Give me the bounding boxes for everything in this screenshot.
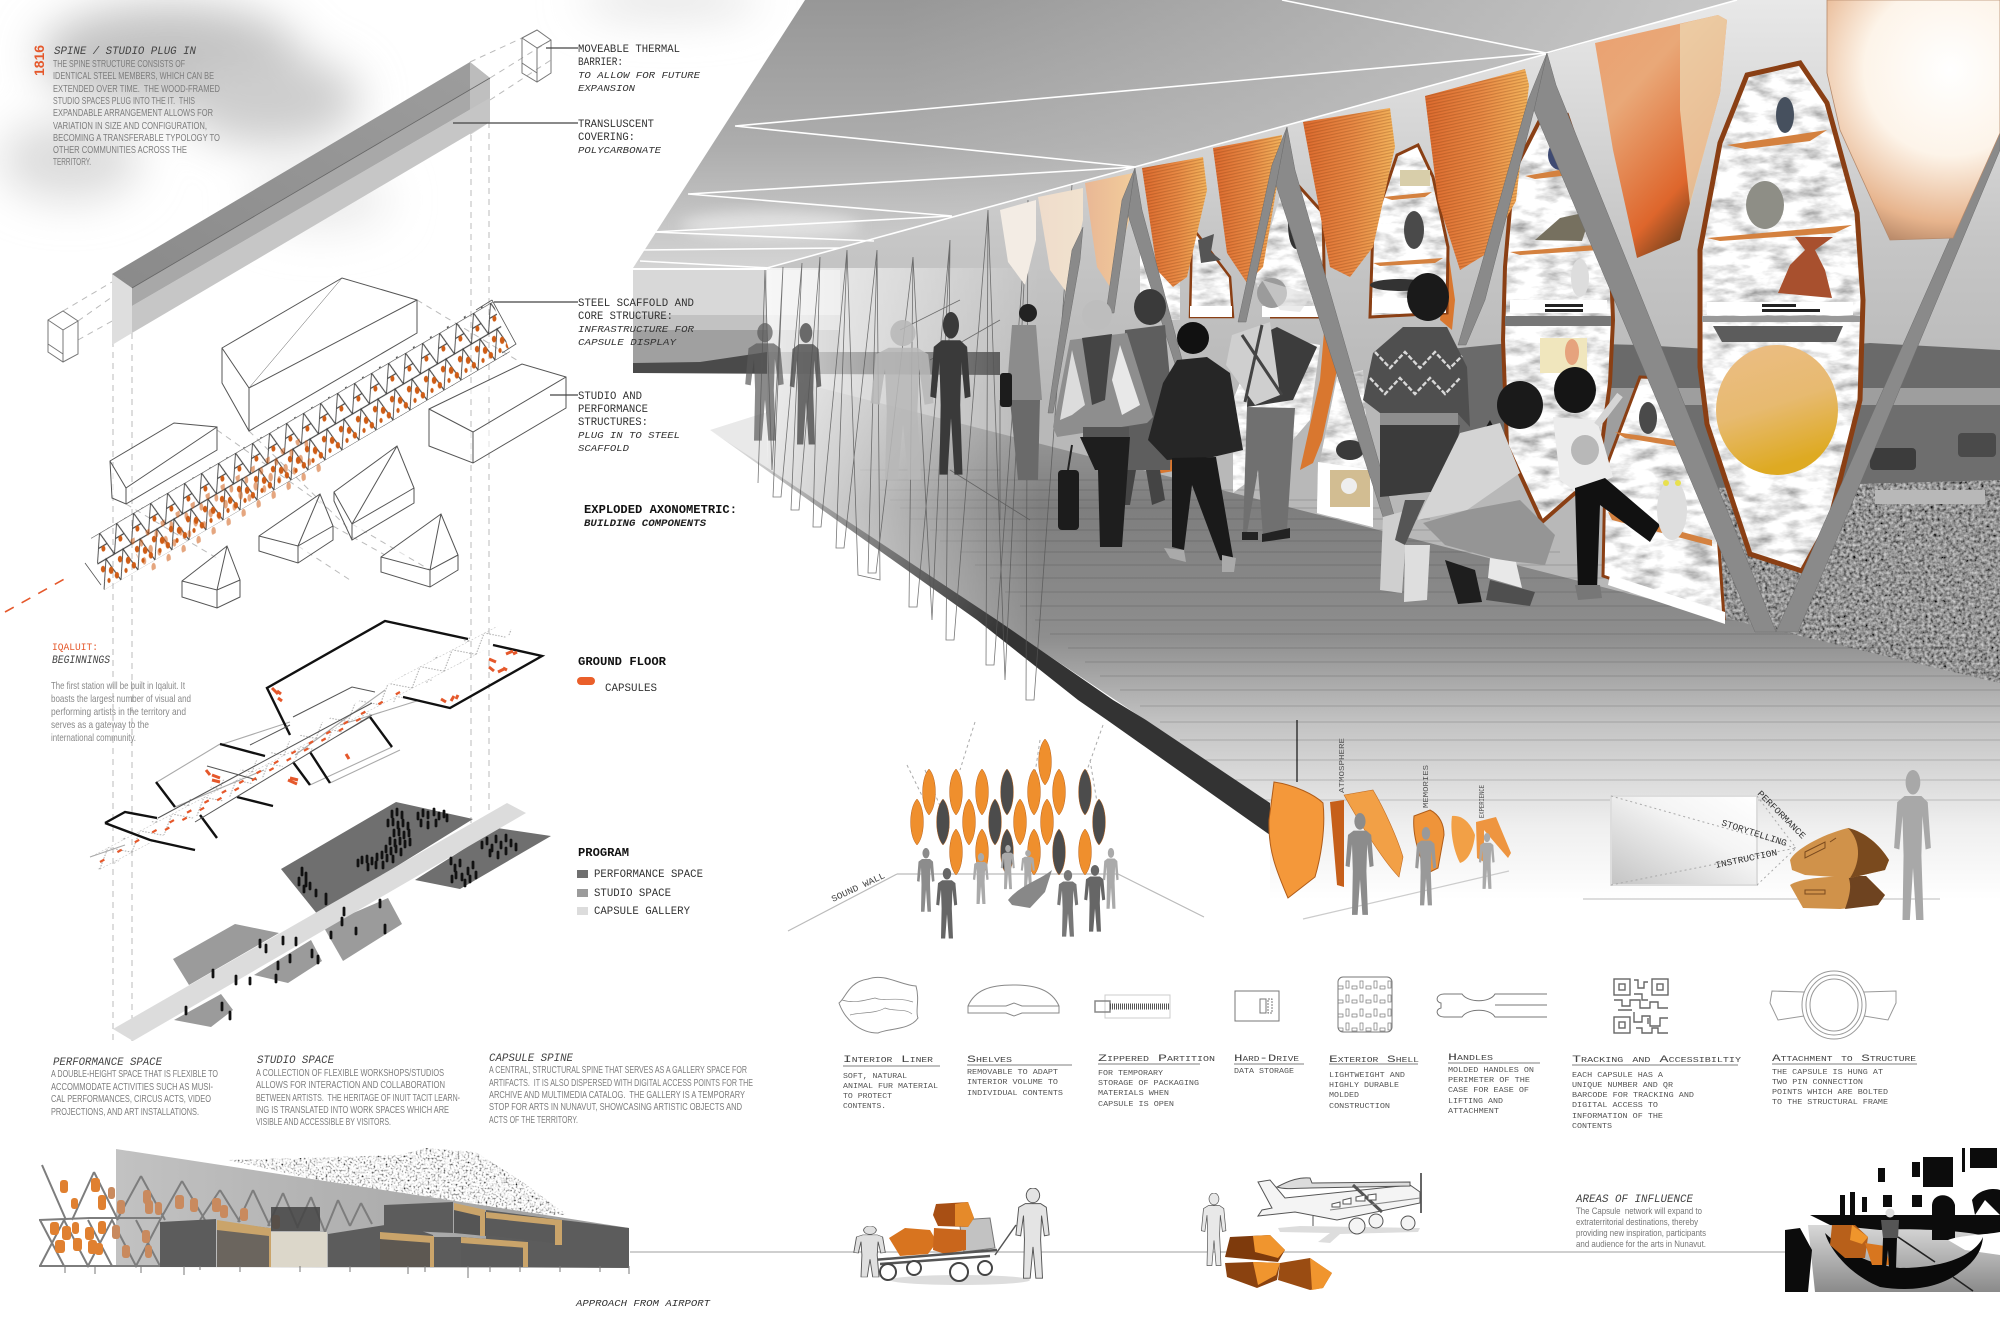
component: zippered partition — [1095, 995, 1215, 1109]
person: woman in black suit — [1148, 322, 1243, 572]
big render: sky backdrop — [633, 0, 2000, 690]
body text: IDENTICAL STEEL MEMBERS, WHICH CAN BE — [53, 70, 214, 82]
body: DIGITAL ACCESS TO — [1572, 1102, 1658, 1110]
body: PERIMETER OF THE — [1448, 1077, 1530, 1085]
text block: areas of influence: extraterritorial destinations, thereby — [1576, 1217, 1698, 1228]
icon: zipper — [1095, 995, 1170, 1018]
callout: studio and performance structures: STUDIO AND — [578, 391, 642, 403]
callout: studio and performance structures: STRUCTURES: — [578, 417, 648, 429]
diagram: capsule uses performance storytelling instruction — [1583, 770, 1940, 920]
gondolier — [1881, 1208, 1973, 1291]
label: studio: STUDIO SPACE — [594, 888, 671, 900]
body: LIGHTWEIGHT AND — [1329, 1072, 1405, 1080]
heading: Attachment to Structure — [1772, 1053, 1916, 1065]
big render: steel A-frames — [1048, 53, 2000, 632]
body: THE CAPSULE IS HUNG AT — [1772, 1069, 1883, 1077]
text block: capsule spine — [489, 1053, 753, 1126]
case: child case — [1603, 377, 1725, 624]
person: distant figures — [745, 323, 821, 445]
body — [843, 1073, 938, 1111]
person: woman in patterned sweater — [1363, 273, 1470, 602]
text block: capsule spine: ARTIFACTS. IT IS ALSO DISPERSED WITH DIGITAL ACCESS POINTS FOR THE — [489, 1077, 753, 1089]
lattice frames — [39, 1165, 372, 1266]
legend: ground floor — [577, 655, 667, 695]
body: DATA STORAGE — [1234, 1068, 1294, 1076]
small capsules — [50, 1178, 280, 1258]
dark panel — [271, 1207, 320, 1231]
case: right boat — [1700, 63, 1863, 571]
people — [1346, 813, 1495, 915]
floor lines — [788, 874, 1204, 931]
body: EACH CAPSULE HAS A — [1572, 1072, 1664, 1080]
case: far small cases — [1140, 227, 1233, 320]
label: performance: PERFORMANCE — [1755, 789, 1807, 841]
icon: liner — [839, 977, 918, 1033]
callout: translucent covering: COVERING: — [578, 132, 635, 144]
body: LIFTING AND — [1448, 1098, 1503, 1106]
heading: Exterior Shell — [1329, 1054, 1419, 1066]
light room edges — [90, 690, 420, 857]
text block: performance space: PROJECTIONS, AND ART INSTALLATIONS. — [51, 1106, 199, 1118]
interior lines — [158, 687, 375, 822]
callout: moveable thermal barrier: MOVEABLE THERMAL — [578, 44, 680, 56]
heading: Zippered Partition — [1098, 1053, 1215, 1065]
artifact: snowy owl — [1657, 480, 1687, 540]
spine band — [90, 625, 517, 872]
label: 1816: 1816 — [31, 45, 47, 76]
body text: VARIATION IN SIZE AND CONFIGURATION, — [53, 120, 207, 132]
people — [917, 845, 1119, 939]
label: SOUND WALL — [830, 871, 887, 905]
text block: studio space: STUDIO SPACE — [257, 1055, 334, 1067]
person: child — [1553, 367, 1660, 600]
wood portal — [270, 1232, 327, 1267]
body — [967, 1069, 1063, 1098]
heading: GROUND FLOOR — [578, 655, 667, 669]
body text: serves as a gateway to the — [51, 719, 149, 731]
callout: studio and performance structures: PLUG IN TO STEEL — [578, 430, 680, 441]
heading: exploded axonometric — [584, 503, 737, 530]
component: tracking and accessibility — [1572, 979, 1742, 1131]
person: man with backpack — [1226, 278, 1317, 542]
text block: performance space: ACCOMMODATE ACTIVITIES SUCH AS MUSI- — [51, 1081, 213, 1093]
heading: Shelves — [967, 1054, 1012, 1066]
callout: studio and performance structures: PERFORMANCE — [578, 404, 648, 416]
body text: EXTENDED OVER TIME. THE WOOD-FRAMED — [53, 83, 220, 95]
body: MOLDED — [1329, 1092, 1359, 1100]
callout: translucent covering: TRANSLUSCENT — [578, 119, 654, 131]
person: man at rail — [1000, 304, 1042, 480]
suitcase — [959, 1218, 995, 1252]
label: memories: MEMORIES — [1423, 765, 1431, 808]
swatch: performance — [577, 870, 588, 878]
case: tall case G — [1370, 145, 1448, 317]
artifact: drum — [1716, 345, 1838, 475]
body: STORAGE OF PACKAGING — [1098, 1080, 1199, 1088]
callout: steel scaffold — [578, 298, 694, 348]
body: POINTS WHICH ARE BOLTED — [1772, 1089, 1888, 1097]
label: CAPSULES — [605, 683, 657, 695]
cart — [873, 1250, 997, 1264]
label: storytelling: STORYTELLING — [1720, 818, 1788, 849]
big render: wooden deck — [767, 375, 2000, 900]
person: woman behind — [1120, 289, 1172, 505]
body: MATERIALS WHEN — [1098, 1090, 1169, 1098]
body: BARCODE FOR TRACKING AND — [1572, 1092, 1694, 1100]
capsule 3 — [1414, 810, 1444, 873]
text block: performance space: A DOUBLE-HEIGHT SPACE THAT IS FLEXIBLE TO — [51, 1068, 218, 1080]
diagram: translucent spine — [112, 62, 490, 345]
studio spaces — [173, 898, 402, 1027]
body: TO PROTECT — [843, 1093, 892, 1101]
heading: exploded axonometric: BUILDING COMPONENTS — [584, 518, 707, 530]
case: mid left lower — [1233, 340, 1320, 493]
capsule marks — [100, 692, 400, 862]
performance spaces — [281, 802, 551, 915]
body — [1572, 1072, 1694, 1131]
heading: IQALUIT: — [52, 642, 98, 654]
text block: capsule spine: ACTS OF THE TERRITORY. — [489, 1114, 578, 1126]
illustration: capsules on cart — [854, 1188, 1049, 1285]
hill texture — [228, 1148, 567, 1215]
icon: thermal barrier top — [522, 30, 551, 82]
icon: ring — [1770, 971, 1896, 1039]
body: HIGHLY DURABLE — [1329, 1082, 1399, 1090]
body: CAPSULE IS OPEN — [1098, 1101, 1174, 1109]
text block: capsule spine: STOP FOR ARTS IN NUNAVUT, SHOWCASING ARTISTIC OBJECTS AND — [489, 1101, 742, 1113]
panel: iqaluit beginnings — [51, 642, 191, 744]
dotted cones — [907, 722, 1103, 830]
illustration: plane and capsules — [1201, 1173, 1421, 1290]
porter left — [854, 1226, 885, 1277]
heading: SPINE / STUDIO PLUG IN — [54, 46, 196, 58]
body text: STUDIO SPACES PLUG INTO THE IT. THIS — [53, 95, 195, 107]
diagram: sound wall — [788, 722, 1204, 939]
body text: EXPANDABLE ARRANGEMENT ALLOWS FOR — [53, 107, 213, 119]
body: CONTENTS — [1572, 1123, 1612, 1131]
body text — [51, 680, 191, 744]
icon: qr code — [1614, 979, 1668, 1033]
body: ANIMAL FUR MATERIAL — [843, 1083, 938, 1091]
icon: shelf — [968, 985, 1059, 1016]
body — [1448, 1067, 1534, 1116]
callout: moveable thermal barrier: EXPANSION — [578, 83, 635, 94]
capsules — [911, 739, 1105, 875]
text block: studio space: BETWEEN ARTISTS. THE HERITAGE OF INUIT TACIT LEARN- — [256, 1092, 460, 1104]
body: FOR TEMPORARY — [1098, 1070, 1164, 1078]
text block: areas of influence: AREAS OF INFLUENCE — [1575, 1194, 1693, 1206]
cloud background — [0, 0, 760, 230]
heading: exploded axonometric: EXPLODED AXONOMETRIC: — [584, 503, 737, 517]
text block: capsule spine: ARCHIVE AND MULTIMEDIA CATALOG. THE GALLERY IS A TEMPORARY — [489, 1089, 745, 1101]
elevation: building approach from airport — [39, 1148, 629, 1278]
callout: translucent covering: POLYCARBONATE — [578, 145, 661, 156]
porter right — [1016, 1188, 1049, 1278]
callout: steel scaffold: INFRASTRUCTURE FOR — [578, 324, 694, 335]
text block: studio space: ING IS TRANSLATED INTO WORK SPACES WHICH ARE — [256, 1104, 449, 1116]
component: interior liner — [839, 977, 940, 1111]
body text: performing artists in the territory and — [51, 706, 186, 718]
body text: TERRITORY. — [53, 156, 91, 168]
buildings — [1785, 1148, 2000, 1292]
swatch: studio — [577, 889, 588, 897]
timber frames and windows — [217, 1203, 562, 1267]
water — [1808, 1225, 2000, 1292]
shadow — [1278, 1226, 1420, 1243]
big render: display cases — [1140, 63, 1863, 624]
callout: steel scaffold: CAPSULE DISPLAY — [578, 337, 677, 348]
label: performance: PERFORMANCE SPACE — [594, 869, 703, 881]
component: hard-drive — [1234, 991, 1304, 1076]
text block: areas of influence: providing new inspiration, participants — [1576, 1228, 1706, 1239]
person: man with dark coat — [930, 312, 971, 475]
icon: drive — [1235, 991, 1279, 1021]
floor line — [1303, 871, 1509, 919]
body: TWO PIN CONNECTION — [1772, 1079, 1863, 1087]
body: ATTACHMENT — [1448, 1108, 1499, 1116]
artifact: red textile — [1778, 237, 1833, 298]
axonometric dashed guide lines — [63, 38, 551, 1041]
body — [1772, 1069, 1888, 1107]
capsules — [889, 1228, 937, 1256]
component: shelves — [967, 985, 1072, 1098]
capsule swatch — [577, 677, 595, 685]
icon: shell — [1338, 977, 1392, 1032]
text block: studio space: VISIBLE AND ACCESSIBLE BY VISITORS. — [256, 1116, 391, 1128]
callout: studio and performance structures: SCAFFOLD — [578, 443, 629, 454]
text block: areas of influence: The Capsule network will expand to — [1576, 1206, 1702, 1217]
case: mid left upper — [1255, 173, 1325, 317]
capsule 2 shell — [1344, 790, 1403, 877]
text block: studio space: ALLOWS FOR INTERACTION AND COLLABORATION — [256, 1079, 445, 1091]
label: atmosphere: ATMOSPHERE — [1339, 738, 1347, 793]
ground — [1583, 898, 1940, 900]
big render: visitors — [745, 273, 1687, 606]
text block: performance space: CAL PERFORMANCES, CIRCUS ACTS, VIDEO — [51, 1093, 211, 1105]
body: SOFT, NATURAL — [843, 1073, 907, 1081]
heading: Handles — [1448, 1052, 1493, 1064]
body — [1098, 1070, 1199, 1109]
legend: program — [577, 846, 703, 918]
body — [1329, 1072, 1405, 1111]
body: CASE FOR EASE OF — [1448, 1087, 1529, 1095]
body text: boasts the largest number of visual and — [51, 693, 191, 705]
person — [1894, 770, 1931, 920]
body: UNIQUE NUMBER AND QR — [1572, 1082, 1674, 1090]
capsule gallery — [113, 803, 526, 1041]
diagram: ground floor plan — [90, 621, 542, 872]
label: gallery: CAPSULE GALLERY — [594, 906, 690, 918]
body: INDIVIDUAL CONTENTS — [967, 1090, 1063, 1098]
heading: Tracking and Accessibiltiy — [1572, 1054, 1742, 1066]
steel scaffold with capsules — [85, 300, 516, 590]
body text: THE SPINE STRUCTURE CONSISTS OF — [53, 58, 185, 70]
image: venice gondola with capsules — [1785, 1147, 2000, 1292]
component: exterior shell — [1329, 977, 1419, 1111]
diagram: suspended capsules atmosphere memories experience — [1269, 720, 1511, 919]
case: lower case H with picture label — [1317, 370, 1373, 527]
text block: studio space: A COLLECTION OF FLEXIBLE WORKSHOPS/STUDIOS — [256, 1067, 444, 1079]
big render: backs of cases — [1132, 250, 1455, 475]
callout: steel scaffold: CORE STRUCTURE: — [578, 311, 673, 323]
shelves — [1373, 130, 1852, 546]
text block: capsule spine: CAPSULE SPINE — [489, 1053, 573, 1065]
callout: moveable thermal barrier: BARRIER: — [578, 57, 623, 69]
text block: studio space — [256, 1055, 460, 1128]
big render: faint shadow under gallery end — [710, 412, 767, 468]
shadow — [890, 1275, 1030, 1285]
callout: translucent covering — [578, 119, 661, 156]
caption: approach from airport: APPROACH FROM AIRPORT — [575, 1298, 711, 1309]
callout: steel scaffold: STEEL SCAFFOLD AND — [578, 298, 694, 310]
capsule stack — [1790, 828, 1889, 909]
tick marks — [65, 1266, 629, 1278]
heading: PROGRAM — [578, 846, 629, 860]
swatch: gallery — [577, 907, 588, 915]
callout leader lines — [453, 48, 578, 395]
callout: moveable thermal barrier: TO ALLOW FOR FUTURE — [578, 70, 700, 81]
body text: The first station will be built in Iqaluit. It — [51, 680, 185, 692]
label: instruction: INSTRUCTION — [1715, 848, 1778, 871]
diagram: program plan — [113, 802, 551, 1041]
body text: international community. — [51, 732, 136, 744]
person: crouching mother — [1395, 381, 1555, 606]
subheading: BEGINNINGS — [52, 655, 110, 667]
heading: Interior Liner — [843, 1054, 934, 1066]
walls — [105, 621, 542, 850]
big render: pale receding capsules — [1000, 173, 1133, 293]
text block: areas of influence — [1575, 1194, 1706, 1250]
capsule 2 — [1330, 800, 1344, 887]
big render: hanging orange capsules — [1142, 15, 1727, 287]
component: handles — [1437, 994, 1547, 1116]
roof wedge — [116, 1149, 629, 1268]
capsule 5 — [1476, 817, 1511, 862]
capsules — [1830, 1225, 1890, 1265]
text block: areas of influence: and audience for the arts in Nunavut. — [1576, 1239, 1706, 1250]
light quay — [1948, 1232, 2000, 1255]
heading: Hard-Drive — [1234, 1053, 1299, 1065]
dark blocks — [160, 1202, 629, 1268]
hanger — [1296, 720, 1298, 782]
text block: capsule spine: A CENTRAL, STRUCTURAL SPINE THAT SERVES AS A GALLERY SPACE FOR — [489, 1064, 747, 1076]
body text: OTHER COMMUNITIES ACROSS THE — [53, 144, 187, 156]
screen — [1611, 796, 1757, 885]
body: INFORMATION OF THE — [1572, 1113, 1663, 1121]
body: CONSTRUCTION — [1329, 1103, 1390, 1111]
plane — [1258, 1173, 1421, 1234]
artifact: small sculptures — [1198, 97, 1794, 460]
panel: spine studio plug in text — [31, 45, 220, 168]
body text — [53, 58, 220, 168]
big render: deck edge beam — [710, 430, 1270, 835]
person: man in grey jacket — [1053, 300, 1153, 547]
icon: handle — [1437, 994, 1547, 1017]
big render: wire frames fading along the gallery — [758, 185, 1072, 700]
capsules — [1225, 1235, 1332, 1290]
component: attachment to structure — [1770, 971, 1917, 1107]
big render: ceiling — [633, 0, 2000, 268]
big render: top right capsule — [1827, 0, 2000, 240]
text block: performance space — [51, 1057, 218, 1118]
body: CONTENTS. — [843, 1103, 886, 1111]
label: experience: EXPERIENCE — [1479, 785, 1487, 818]
body: TO THE STRUCTURAL FRAME — [1772, 1099, 1888, 1107]
case: middle boat — [1503, 115, 1613, 522]
person: woman in coat — [871, 320, 934, 480]
ground line — [630, 1251, 1786, 1253]
text block: performance space: PERFORMANCE SPACE — [53, 1057, 162, 1069]
crowd — [186, 809, 516, 1019]
capsule 4 — [1451, 816, 1475, 863]
gondola — [1825, 1233, 1983, 1289]
big render: hills and terrain — [1440, 342, 2000, 690]
projection lines — [1611, 796, 1796, 885]
body: REMOVABLE TO ADAPT — [967, 1069, 1058, 1077]
capsule 1 — [1269, 782, 1324, 898]
body: MOLDED HANDLES ON — [1448, 1067, 1534, 1075]
callout: studio and performance structures — [578, 391, 680, 454]
red dashed axis — [5, 577, 68, 612]
body: INTERIOR VOLUME TO — [967, 1079, 1058, 1087]
wire volumes: studio and performance structures — [110, 278, 566, 608]
icon: thermal barrier bottom — [48, 311, 78, 362]
porter — [1201, 1193, 1226, 1266]
body text: BECOMING A TRANSFERABLE TYPOLOGY TO — [53, 132, 220, 144]
callout: moveable thermal barrier — [578, 44, 700, 94]
big render: fade of gallery end to white — [767, 268, 1047, 660]
